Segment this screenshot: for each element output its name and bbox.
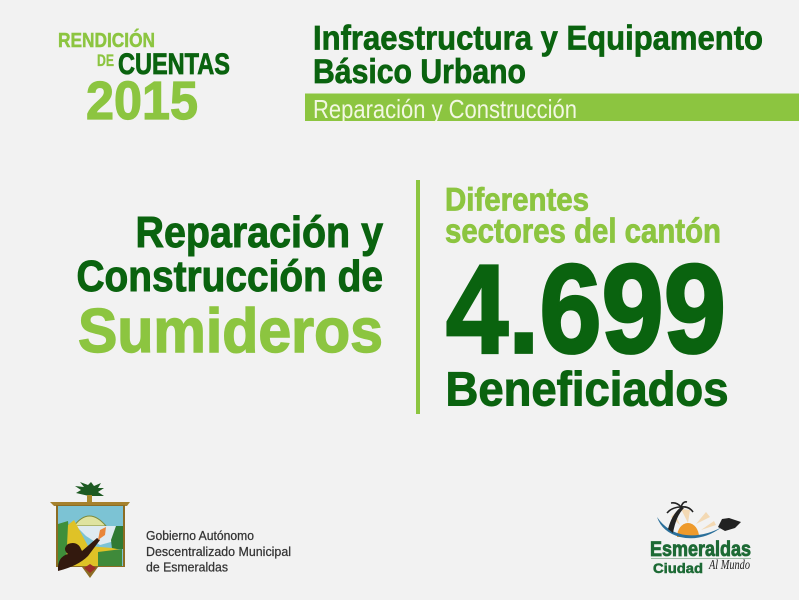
institution name: Descentralizado Municipal [146, 544, 291, 559]
logo: Esmeraldas Ciudad Al Mundo [650, 502, 751, 576]
title: Infraestructura y Equipamento [313, 20, 763, 58]
logo: Rendición de Cuentas 2015: RENDICIÓN [58, 28, 155, 52]
title [313, 20, 763, 91]
institution name: de Esmeraldas [146, 560, 228, 574]
heading: Reparación y Construcción de Sumideros: Construcción de [76, 252, 383, 301]
icon: municipal coat of arms [50, 482, 130, 578]
location text [445, 182, 721, 250]
logo: Esmeraldas Ciudad Al Mundo: Ciudad [653, 560, 703, 576]
institution name [146, 528, 291, 574]
location text: sectores del cantón [445, 212, 721, 250]
subtitle bar [305, 94, 799, 124]
divider [416, 180, 420, 414]
heading: Reparación y Construcción de Sumideros: Reparación y [136, 208, 383, 257]
title: Básico Urbano [313, 53, 526, 91]
stat label: Beneficiados: Beneficiados [446, 364, 728, 416]
subtitle bar: Reparación y Construcción [313, 94, 577, 124]
logo: Esmeraldas Ciudad Al Mundo: Esmeraldas [650, 538, 751, 561]
location text: Diferentes [445, 182, 589, 218]
logo: Rendición de Cuentas 2015: CUENTAS [118, 48, 230, 81]
logo: Rendición de Cuentas 2015: 2015 [86, 71, 198, 131]
logo: Esmeraldas Ciudad Al Mundo: Al Mundo [708, 558, 750, 573]
institution name: Gobierno Autónomo [146, 528, 254, 543]
logo: Rendición de Cuentas 2015 [58, 28, 230, 131]
stat: 4.699: 4.699 [446, 238, 726, 380]
logo: Rendición de Cuentas 2015: DE [97, 51, 114, 70]
heading: Reparación y Construcción de Sumideros [76, 208, 383, 366]
heading: Reparación y Construcción de Sumideros: Sumideros [78, 297, 383, 366]
